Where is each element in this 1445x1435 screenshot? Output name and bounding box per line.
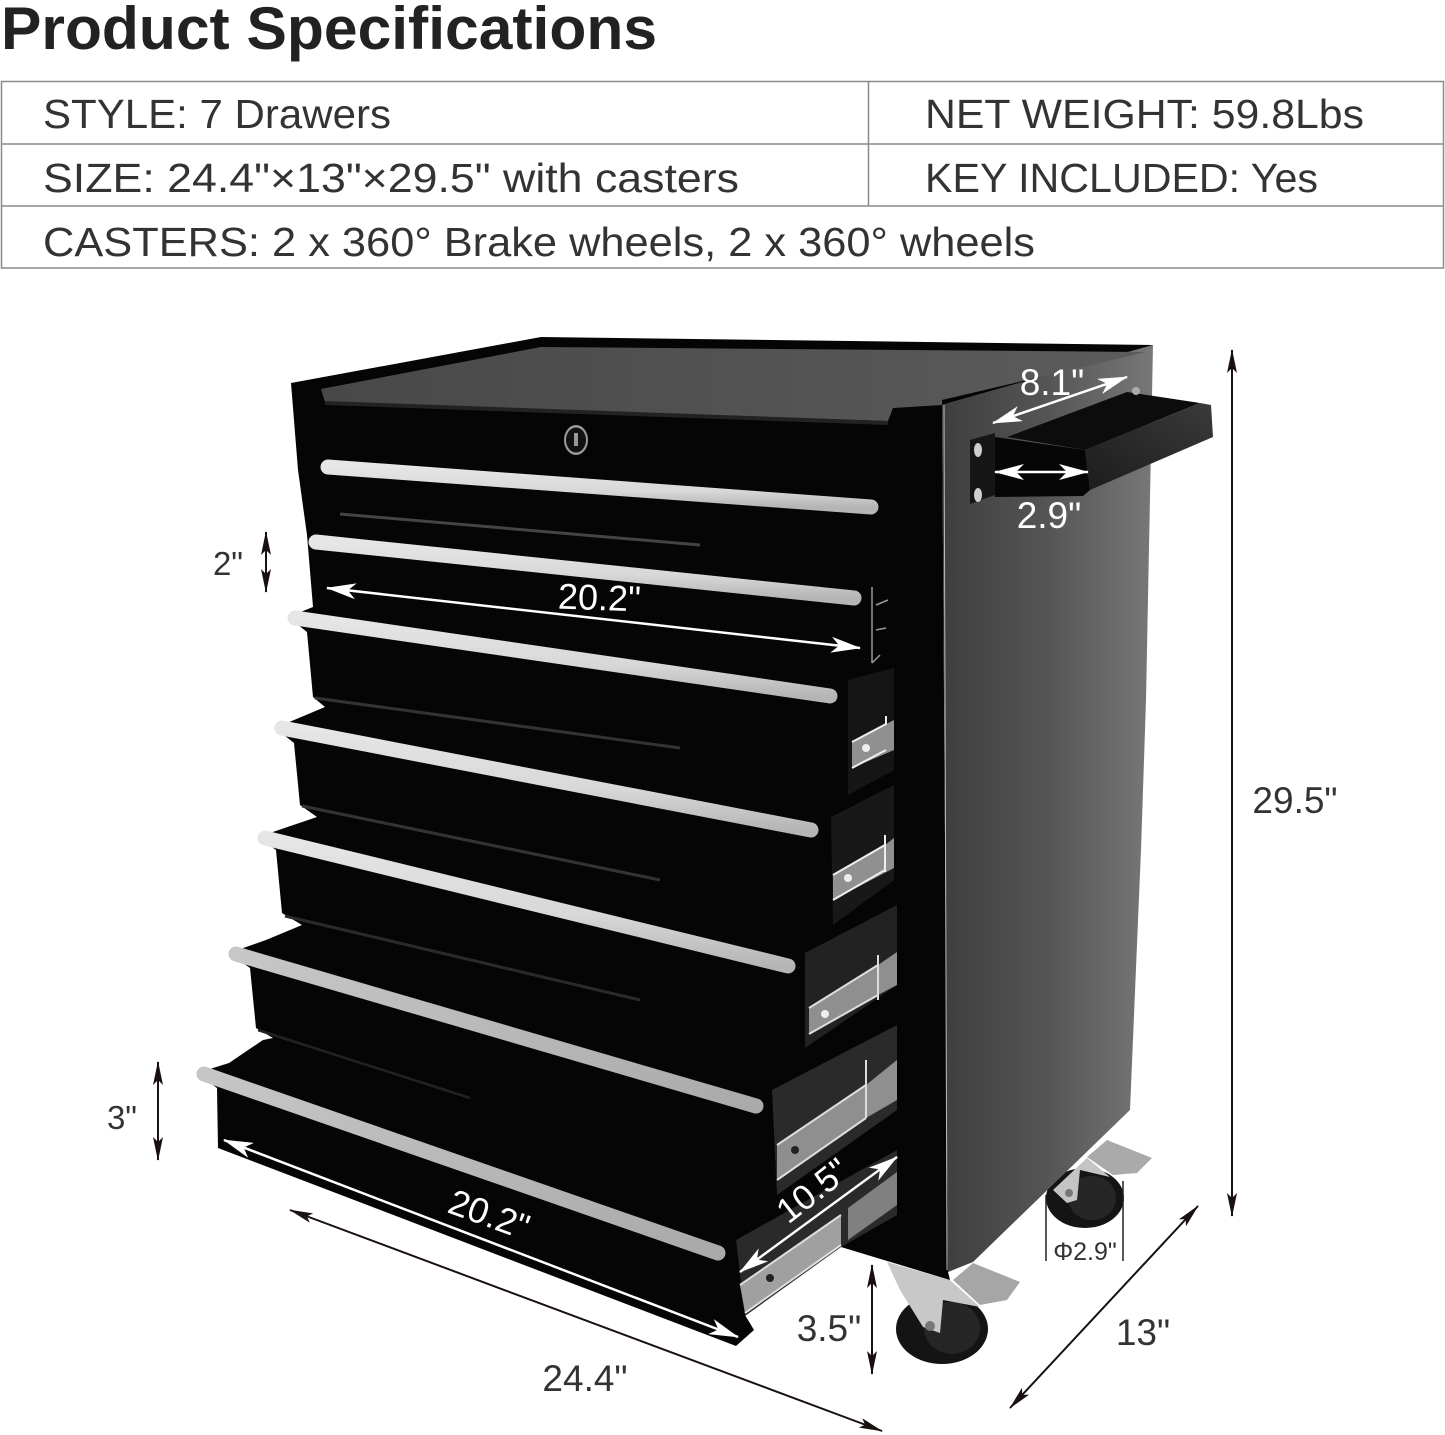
drawer 7 <box>204 1074 897 1316</box>
cabinet silhouette <box>197 337 1153 1346</box>
dimension: drawer height 3: 3" <box>107 1099 137 1136</box>
drawer 6 <box>236 954 897 1195</box>
dimension: drawer height 2 <box>213 532 266 592</box>
dimension: drawer height 3 <box>107 1062 158 1160</box>
drawer 2 <box>316 542 888 663</box>
dimension: width 24.4: 24.4" <box>542 1358 628 1399</box>
spec: style: STYLE: 7 Drawers <box>43 91 391 137</box>
dimension: caster diameter 2.9 <box>1046 1181 1123 1266</box>
dimension: drawer width upper 20.2 <box>327 576 860 648</box>
spec: key included: KEY INCLUDED: Yes <box>925 155 1318 201</box>
dimension: handle length 8.1: 8.1" <box>1020 362 1084 403</box>
dimension: drawer width lower 20.2 <box>224 1140 738 1337</box>
dimension: caster diameter 2.9: Φ2.9" <box>1053 1238 1117 1266</box>
dimension: depth 13 <box>1010 1206 1198 1408</box>
dimension: depth 13: 13" <box>1116 1312 1170 1353</box>
handle front lip <box>1085 403 1213 490</box>
caster: rear right <box>1046 1140 1152 1228</box>
cabinet top tray surface <box>321 347 1146 421</box>
dimension: caster height 3.5: 3.5" <box>797 1308 861 1349</box>
handle tray interior <box>1007 392 1200 450</box>
cabinet right side panel <box>942 345 1153 1272</box>
dimension: handle length 8.1 <box>993 362 1127 423</box>
drawer 3 <box>295 618 894 795</box>
side handle <box>970 387 1213 504</box>
caster: front right <box>887 1262 1020 1364</box>
tool cabinet illustration <box>197 337 1213 1364</box>
dimension: drawer width upper 20.2: 20.2" <box>557 576 642 619</box>
dimension: drawer depth 10.5: 10.5" <box>769 1151 857 1231</box>
spec: net weight: NET WEIGHT: 59.8Lbs <box>925 91 1364 137</box>
drawer 1 <box>328 467 871 545</box>
drawer 4 <box>282 728 894 925</box>
handle inner face <box>995 437 1090 497</box>
spec: casters: CASTERS: 2 x 360° Brake wheels, 2 x 360° wheels <box>43 219 1035 265</box>
dimension: width 24.4 <box>290 1210 882 1431</box>
dimension: handle width 2.9 <box>995 472 1088 536</box>
lock <box>564 425 588 455</box>
drawer 5 <box>265 838 897 1048</box>
spec: size: SIZE: 24.4"×13"×29.5" with casters <box>43 155 739 201</box>
dimension: handle width 2.9: 2.9" <box>1017 495 1081 536</box>
dimension: drawer height 2: 2" <box>213 545 243 582</box>
dimension: overall height 29.5: 29.5" <box>1252 780 1338 821</box>
dimension: caster height 3.5 <box>797 1265 872 1374</box>
dimension: drawer width lower 20.2: 20.2" <box>443 1181 535 1248</box>
dimension: drawer depth 10.5 <box>740 1151 897 1272</box>
handle mounting plate <box>970 433 995 504</box>
specification table <box>1 81 1444 268</box>
